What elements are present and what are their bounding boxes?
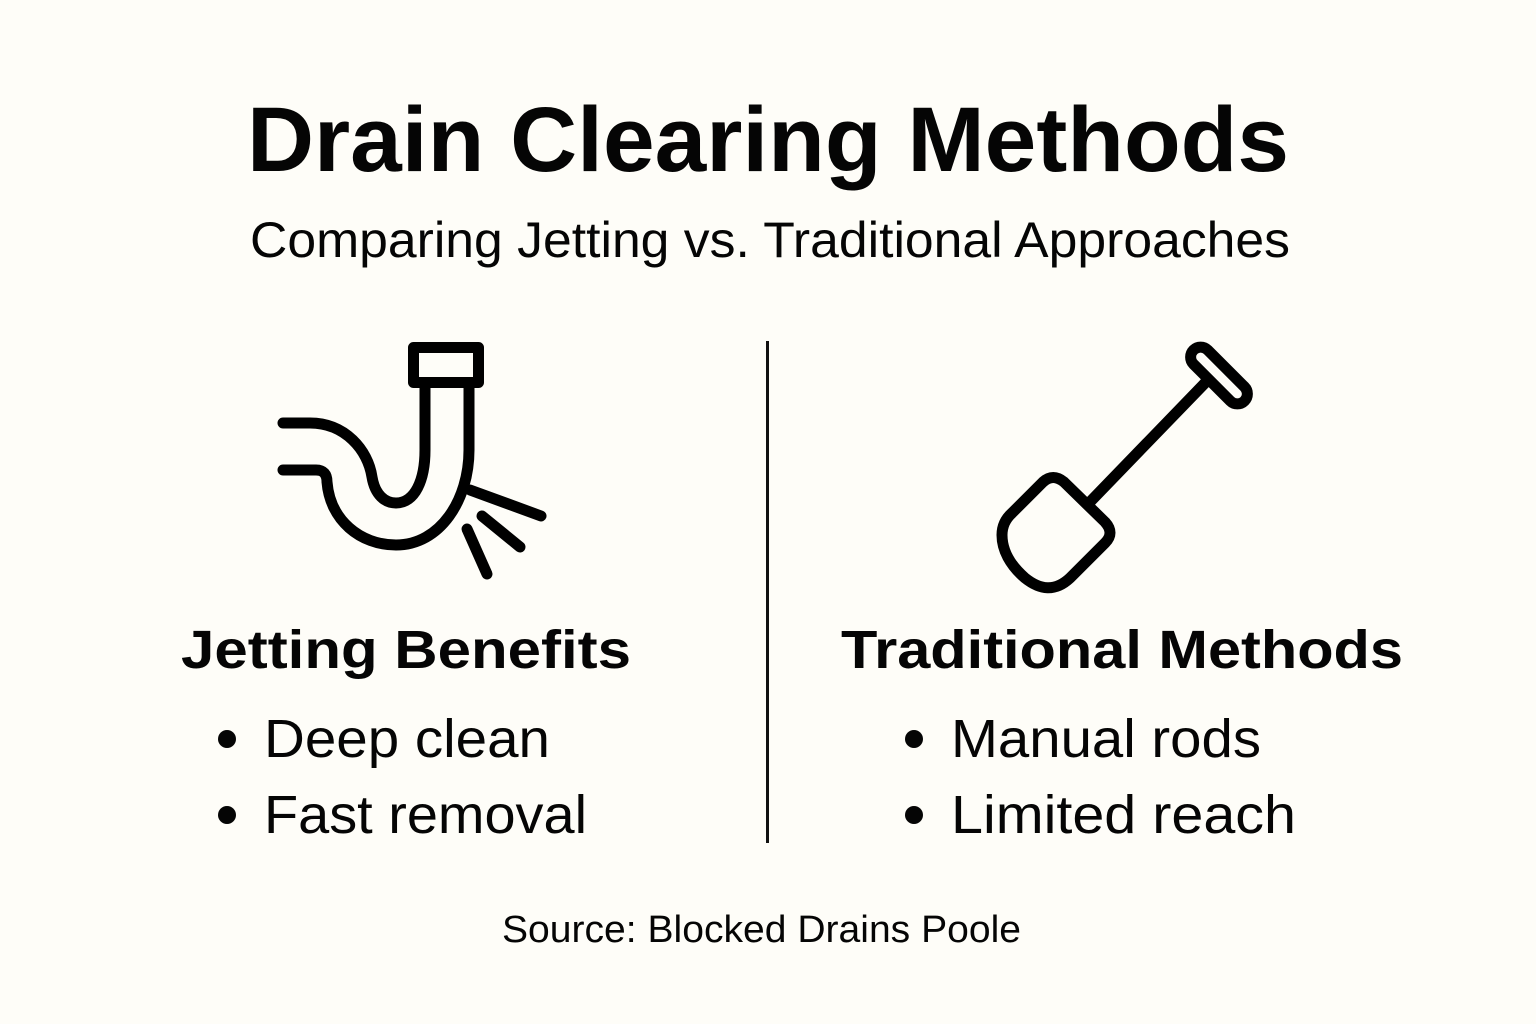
list: traditional methods: Manual rods <box>951 709 1261 769</box>
title: Drain Clearing Methods <box>247 89 1289 191</box>
list: jetting benefits <box>218 709 587 845</box>
panel: jetting benefits <box>181 348 631 845</box>
panel: traditional methods <box>841 343 1403 845</box>
divider <box>766 341 769 843</box>
heading: traditional methods: Traditional Methods <box>841 620 1403 680</box>
list: jetting benefits: Deep clean <box>264 709 550 769</box>
icon: jetting pipe with spray <box>283 348 541 574</box>
icon: shovel <box>1002 343 1252 588</box>
source note: Source: Blocked Drains Poole <box>502 909 1021 951</box>
heading: jetting benefits: Jetting Benefits <box>181 620 631 680</box>
list: traditional methods <box>905 709 1296 845</box>
list: traditional methods: Limited reach <box>951 785 1296 845</box>
list: jetting benefits: Fast removal <box>264 785 587 845</box>
subtitle: Comparing Jetting vs. Traditional Approaches <box>250 212 1290 268</box>
